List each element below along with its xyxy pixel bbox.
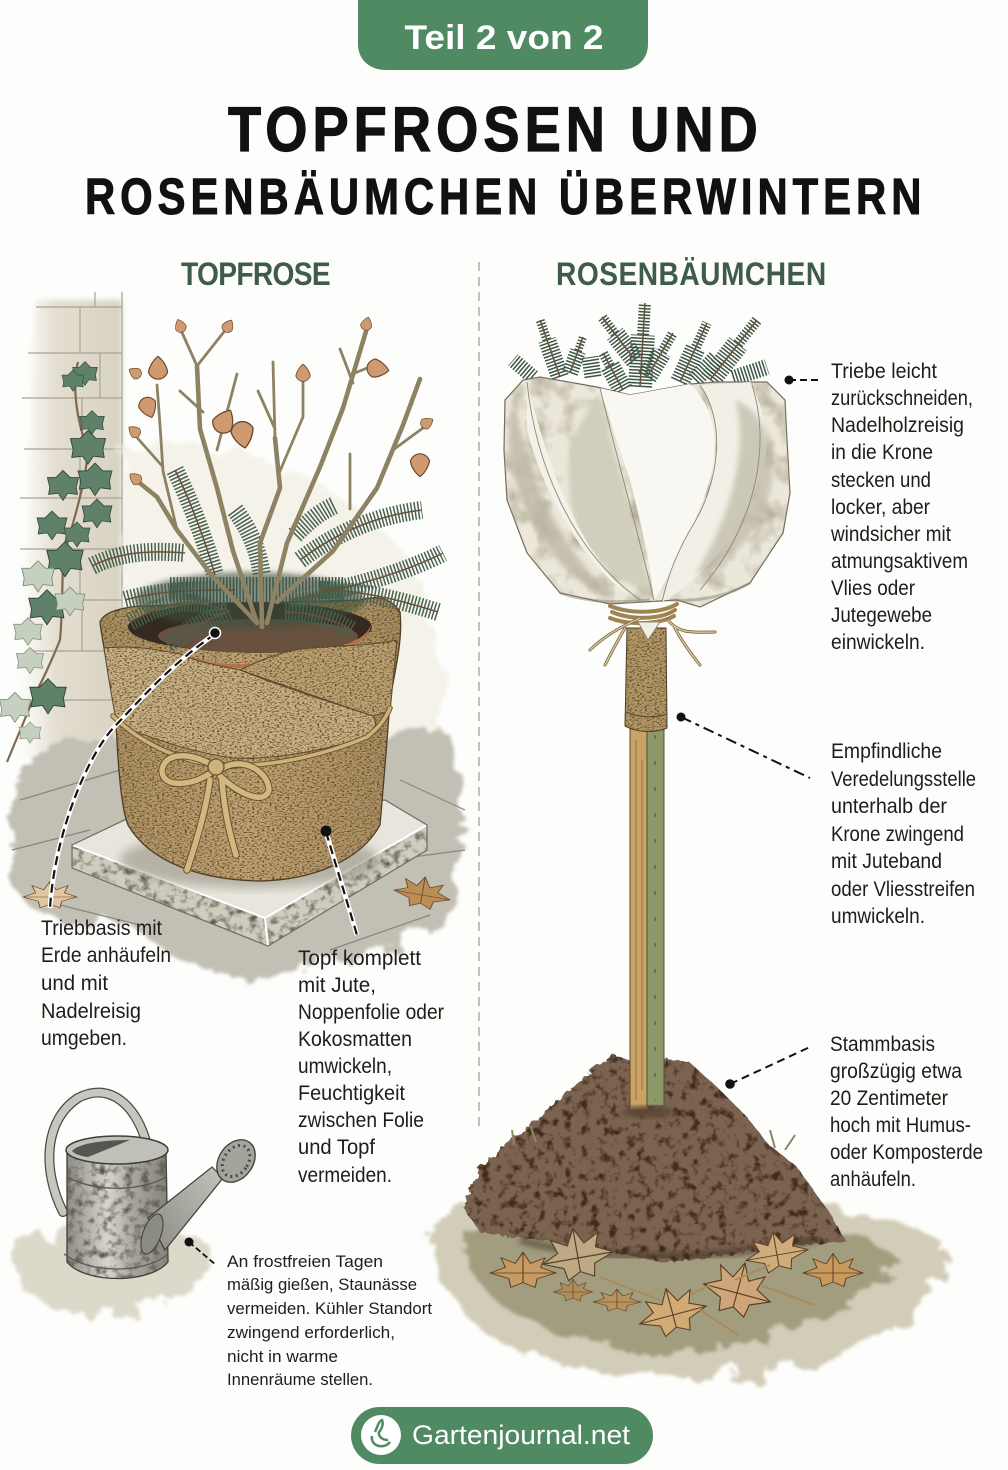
bare rose canes [133, 328, 427, 627]
text: Topf: mit Jute, [298, 974, 376, 997]
text: graft advice: Empfindliche [831, 740, 942, 763]
text: graft advice: Krone zwingend [831, 823, 964, 846]
text: Triebbasis: und mit [41, 972, 108, 995]
ground wash [17, 1229, 206, 1316]
text: crown advice: Nadelholzreisig [831, 414, 964, 437]
illustration: standard rose tree [432, 303, 946, 1378]
background wash behind plant [122, 444, 446, 750]
text: stem base advice: großzügig etwa [830, 1060, 962, 1083]
grass tufts [512, 1125, 795, 1150]
text: stem base advice: anhäufeln. [830, 1168, 916, 1191]
text: graft advice: umwickeln. [831, 905, 925, 928]
burlap upper right fold [240, 640, 397, 716]
fleece wrap on crown [504, 377, 790, 607]
text: watering advice: vermeiden. Kühler Standort [227, 1299, 432, 1318]
text: crown advice: atmungsaktivem [831, 550, 968, 573]
text: stem base advice: hoch mit Humus- [830, 1114, 971, 1137]
text: watering advice [227, 1252, 432, 1389]
illustration: potted rose wrapped in jute [0, 292, 465, 977]
text: watering advice: nicht in warme [227, 1347, 338, 1366]
text: crown advice: einwickeln. [831, 631, 925, 654]
ground wash under mound [432, 1190, 946, 1378]
title: ROSENBÄUMCHEN ÜBERWINTERN [85, 168, 921, 225]
text: Topf [298, 947, 444, 1187]
text: graft advice [831, 740, 976, 928]
text: Triebbasis: Triebbasis mit [41, 917, 162, 940]
stake and stem [622, 728, 674, 1118]
text: stem base advice: oder Komposterde [830, 1141, 983, 1164]
title: TOPFROSEN UND [228, 95, 758, 165]
pot shadow and burlap body [100, 598, 401, 888]
soil and terracotta inside pot [128, 602, 372, 668]
text: crown advice: Vlies oder [831, 577, 915, 600]
maple leaves [490, 1222, 863, 1342]
footer logo icon [361, 1415, 401, 1455]
text: stem base advice: 20 Zentimeter [830, 1087, 948, 1110]
text: Triebbasis [41, 917, 171, 1050]
footer pill: Gartenjournal.net: Gartenjournal.net [412, 1420, 631, 1450]
callout line: shoot base [50, 628, 220, 908]
text: Topf: zwischen Folie [298, 1109, 424, 1132]
text: crown advice: Triebe leicht [831, 360, 937, 383]
burlap front flap [104, 647, 375, 758]
text: Triebbasis: Nadelreisig [41, 1000, 141, 1023]
text: graft advice: oder Vliesstreifen [831, 878, 975, 901]
text: graft advice: Veredelungsstelle [831, 768, 976, 791]
text: stem base advice [830, 1033, 983, 1191]
heading: Topfrose: TOPFROSE [181, 257, 331, 292]
brick wall [20, 292, 122, 760]
text: crown advice: stecken und [831, 469, 931, 492]
text: Triebbasis: umgeben. [41, 1027, 127, 1050]
text: Topf: Kokosmatten [298, 1028, 412, 1051]
text: watering advice: An frostfreien Tagen [227, 1252, 383, 1271]
text: crown advice: windsicher mit [830, 523, 951, 546]
text: Topf: umwickeln, [298, 1055, 392, 1078]
fir brushwood in the pot [92, 470, 443, 645]
callout line: crown [784, 376, 822, 384]
text: watering advice: Innenräume stellen. [227, 1370, 373, 1389]
text: watering advice: zwingend erforderlich, [227, 1323, 395, 1342]
text: crown advice [830, 360, 973, 654]
soil mound [463, 1055, 845, 1262]
twine tie [590, 604, 715, 665]
jute rope and bow [113, 708, 390, 870]
text: stem base advice: Stammbasis [830, 1033, 935, 1056]
header badge: Teil 2 von 2 [358, 0, 648, 70]
text: graft advice: unterhalb der [831, 795, 947, 818]
spout [136, 1132, 263, 1257]
text: Triebbasis: Erde anhäufeln [41, 944, 171, 967]
illustration: watering can [17, 1093, 263, 1316]
handle [49, 1093, 149, 1212]
callout line: watering [184, 1238, 216, 1265]
text: Topf: Feuchtigkeit [298, 1082, 405, 1105]
text: crown advice: in die Krone [831, 441, 933, 464]
text: Topf: Noppenfolie oder [298, 1001, 444, 1024]
fir sprigs in crown [513, 303, 767, 390]
footer pill: Gartenjournal.net [351, 1407, 653, 1464]
body [64, 1136, 168, 1278]
title [85, 95, 921, 225]
callout line: pot wrap [320, 826, 357, 935]
text: crown advice: Jutegewebe [831, 604, 932, 627]
jute-wrapped graft section [625, 628, 667, 732]
header badge: Teil 2 von 2: Teil 2 von 2 [404, 19, 604, 57]
text: crown advice: zurückschneiden, [831, 387, 973, 410]
text: watering advice: mäßig gießen, Staunässe [227, 1275, 417, 1294]
dried leaves on canes [125, 316, 436, 487]
paving ground [12, 731, 465, 977]
ivy climbing the wall [0, 362, 112, 762]
text: crown advice: locker, aber [831, 496, 930, 519]
text: Topf: Topf komplett [298, 947, 421, 970]
heading: Rosenbäumchen: ROSENBÄUMCHEN [556, 257, 826, 292]
stone slab [72, 800, 427, 946]
text: graft advice: mit Juteband [831, 850, 942, 873]
text: Topf: vermeiden. [298, 1164, 392, 1187]
fallen leaves on paving [23, 872, 453, 912]
callout line: stem base [725, 1047, 810, 1089]
text: Topf: und Topf [298, 1136, 375, 1159]
callout line: graft [676, 712, 810, 778]
